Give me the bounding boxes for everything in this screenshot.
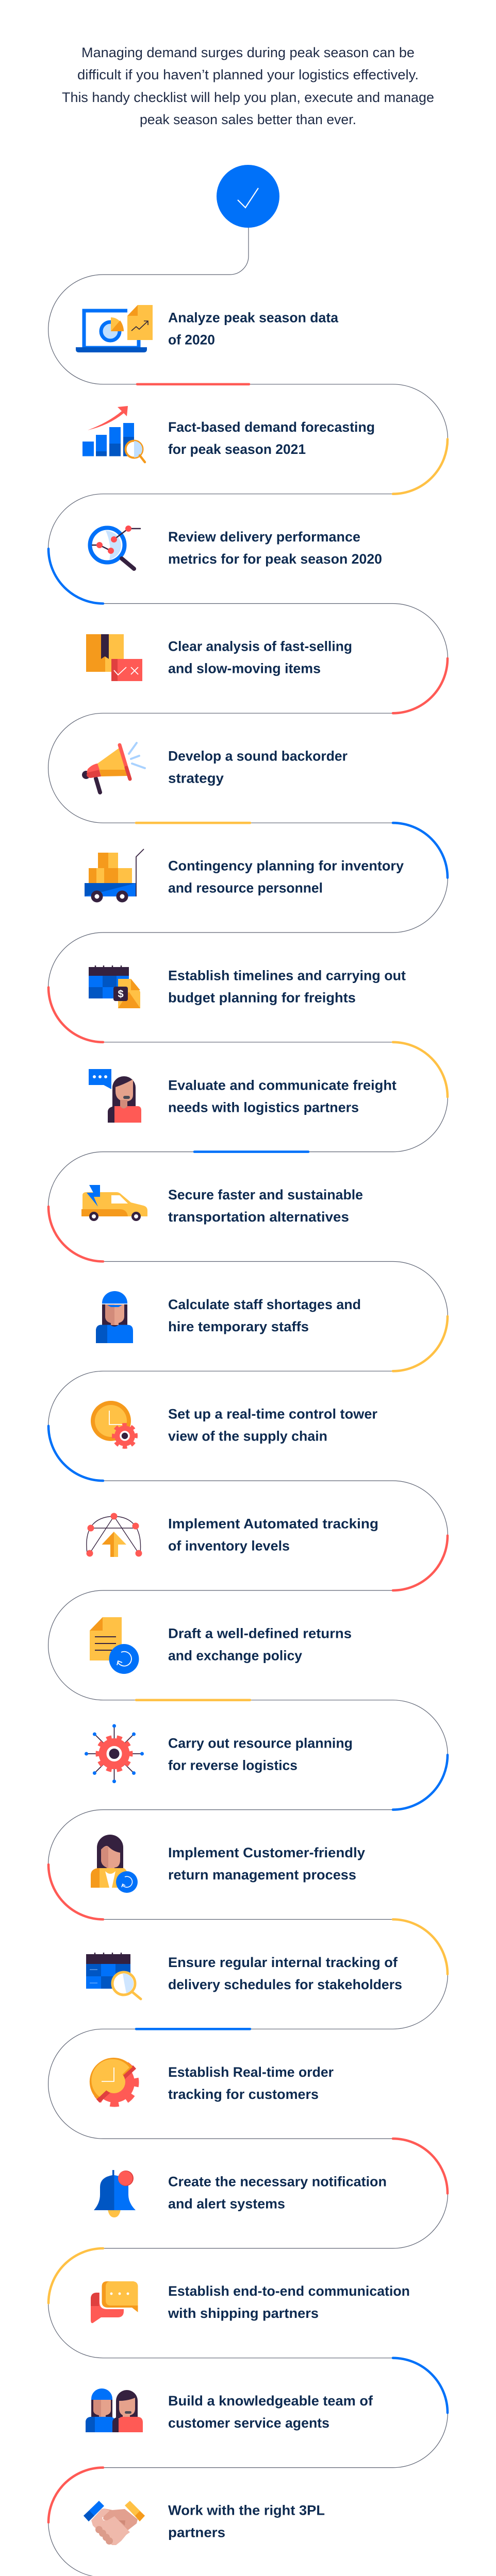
step label: Secure faster and sustainable [168, 1187, 363, 1202]
step 18 [94, 2170, 387, 2217]
step label: Create the necessary notification [168, 2174, 387, 2190]
step label: Review delivery performance [168, 529, 360, 545]
step label: Establish Real-time order [168, 2064, 334, 2080]
step label: for peak season 2021 [168, 442, 306, 457]
step label [168, 2174, 387, 2211]
step label [168, 968, 406, 1006]
step label: Build a knowledgeable team of [168, 2393, 373, 2409]
step label [168, 419, 375, 457]
icon: calendar with budget doc [89, 965, 140, 1008]
icon: cart with boxes [85, 849, 144, 901]
icon: megaphone [82, 743, 145, 792]
step label: tracking for customers [168, 2087, 319, 2102]
step label [168, 1845, 365, 1883]
winding route line connecting all steps [48, 228, 448, 2576]
step label [168, 2064, 334, 2102]
icon: document with return arrow [90, 1617, 139, 1674]
icon: notification bell [94, 2170, 136, 2217]
icon: calendar with magnifier [86, 1953, 141, 1999]
icon: network with upward arrow [87, 1513, 142, 1557]
step label: Draft a well-defined returns [168, 1626, 352, 1641]
step label: Carry out resource planning [168, 1735, 353, 1751]
step label: Calculate staff shortages and [168, 1297, 361, 1312]
step label: Analyze peak season data [168, 310, 339, 326]
step label: transportation alternatives [168, 1209, 349, 1225]
icon: magnifier with metrics [90, 526, 141, 569]
step label [168, 1297, 361, 1334]
icon: bar chart forecast [82, 406, 145, 462]
step label [168, 1406, 377, 1444]
icon: staff member with cap [96, 1291, 133, 1343]
step label [168, 2283, 410, 2321]
step label: Work with the right 3PL [168, 2503, 325, 2518]
step label: Clear analysis of fast-selling [168, 639, 352, 654]
step 7 [89, 965, 406, 1008]
step label: Set up a real-time control tower [168, 1406, 377, 1422]
step 9 [81, 1185, 363, 1225]
step label: Fact-based demand forecasting [168, 419, 375, 435]
icon: agent with speech bubble [89, 1069, 141, 1123]
step label [168, 1735, 353, 1773]
step 10 [96, 1291, 361, 1343]
step label: partners [168, 2524, 225, 2540]
icon: chat bubbles [91, 2279, 139, 2323]
step label: of 2020 [168, 332, 215, 347]
step label: and resource personnel [168, 880, 323, 895]
step 14 [85, 1724, 353, 1783]
icon: clock and gear [90, 2058, 137, 2105]
step label: of inventory levels [168, 1538, 290, 1554]
step label: metrics for for peak season 2020 [168, 551, 382, 567]
step label [168, 310, 339, 347]
step 13 [90, 1617, 352, 1674]
step label: with shipping partners [168, 2306, 319, 2321]
step label: Develop a sound backorder [168, 748, 348, 764]
step label [168, 529, 382, 567]
step 12 [87, 1513, 378, 1557]
step label [168, 2503, 325, 2540]
step label: delivery schedules for stakeholders [168, 1977, 402, 1992]
step label: Implement Automated tracking [168, 1516, 378, 1531]
step label [168, 1955, 402, 1992]
intro text: This handy checklist will help you plan, execute and manage [62, 90, 434, 105]
step label: and slow-moving items [168, 660, 321, 676]
step label: Establish end-to-end communication [168, 2283, 410, 2299]
step label [168, 858, 404, 895]
icon: gear with network nodes [85, 1724, 144, 1783]
icon: fast delivery van [81, 1185, 147, 1220]
step 3 [90, 526, 382, 569]
icon: customer service woman with return arrow [91, 1835, 138, 1893]
step 11 [91, 1401, 377, 1447]
step label [168, 1187, 363, 1225]
step label: budget planning for freights [168, 990, 356, 1006]
intro text: peak season sales better than ever. [140, 112, 356, 127]
step 17 [90, 2058, 334, 2105]
step label: return management process [168, 1867, 356, 1883]
step 15 [91, 1835, 365, 1893]
step label: Establish timelines and carrying out [168, 968, 406, 983]
icon: two team members [86, 2388, 143, 2432]
step label [168, 1078, 396, 1115]
intro text: difficult if you haven’t planned your logistics effectively. [77, 67, 419, 82]
step label: customer service agents [168, 2415, 329, 2431]
step label: Ensure regular internal tracking of [168, 1955, 398, 1970]
step label [168, 639, 352, 676]
step 16 [86, 1953, 402, 1999]
step 20 [86, 2388, 373, 2432]
step label: Implement Customer-friendly [168, 1845, 365, 1860]
intro text [62, 45, 434, 127]
step label: and alert systems [168, 2196, 285, 2211]
start check badge [217, 165, 279, 228]
icon: clock with gear [91, 1401, 136, 1447]
step 5 [82, 743, 348, 792]
step label: Contingency planning for inventory [168, 858, 404, 874]
step label: strategy [168, 771, 224, 786]
step 1 [76, 305, 339, 352]
step label [168, 748, 348, 786]
step label [168, 2393, 373, 2431]
step label: for reverse logistics [168, 1758, 297, 1773]
step label: and exchange policy [168, 1648, 302, 1663]
step label: Evaluate and communicate freight [168, 1078, 396, 1093]
intro text: Managing demand surges during peak season can be [81, 45, 415, 60]
step label: needs with logistics partners [168, 1099, 359, 1115]
icon: box and checklist card [86, 634, 142, 681]
icon: calendar with budget doc: $ [118, 989, 124, 1000]
icon: laptop with charts [76, 305, 153, 352]
step label: hire temporary staffs [168, 1319, 309, 1334]
step 4 [86, 634, 352, 681]
step 8 [89, 1069, 396, 1123]
step 21 [84, 2501, 325, 2545]
step 19 [91, 2279, 410, 2323]
step label: view of the supply chain [168, 1428, 327, 1444]
coloured route highlights [48, 384, 448, 2576]
icon: handshake [84, 2501, 145, 2545]
step label [168, 1626, 352, 1663]
step 2 [82, 406, 375, 462]
step 6 [85, 849, 404, 901]
step label [168, 1516, 378, 1554]
